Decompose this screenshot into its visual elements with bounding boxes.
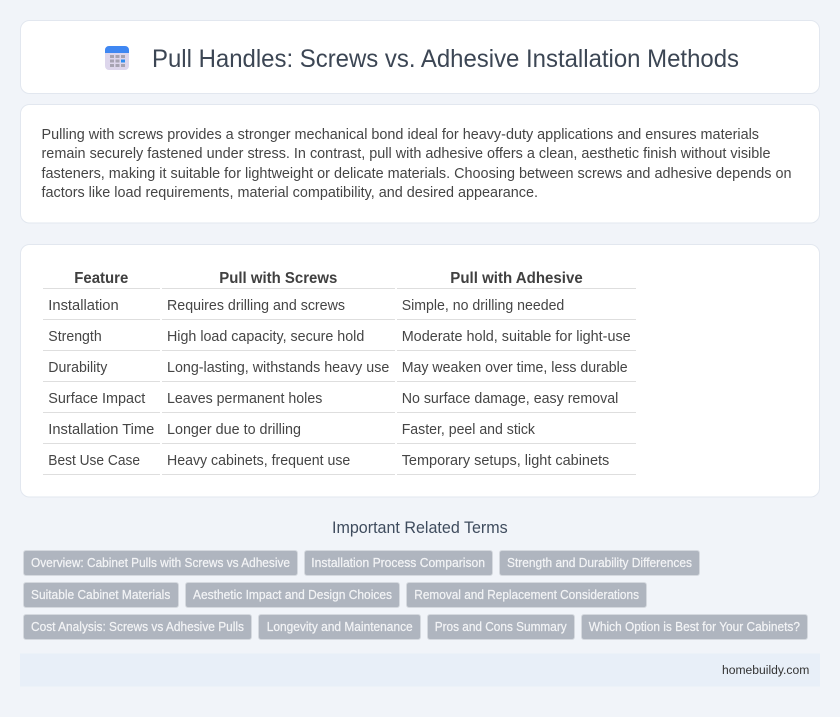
- row: installation time: Faster, peel and stick: [402, 422, 536, 438]
- row: installation: [48, 298, 564, 314]
- row: installation time: Longer due to drilling: [167, 422, 301, 438]
- tag: Installation Process Comparison: [311, 556, 485, 570]
- row: durability: Long-lasting, withstands heavy use: [167, 360, 389, 376]
- row: surface impact: Surface Impact: [48, 391, 145, 407]
- row: best use case: Heavy cabinets, frequent use: [167, 453, 350, 469]
- summary text: Pulling with screws provides a stronger mechanical bond ideal for heavy-duty applications and ensures materials: [42, 127, 759, 143]
- tag: [582, 614, 808, 640]
- table header: Pull with Screws: [219, 270, 338, 287]
- tag: Strength and Durability Differences: [507, 556, 692, 570]
- summary text: [42, 127, 792, 201]
- header panel: [20, 20, 820, 94]
- icon: calendar: [105, 46, 129, 70]
- row: strength: High load capacity, secure hold: [167, 329, 364, 345]
- tag: Which Option is Best for Your Cabinets?: [589, 620, 800, 634]
- table header: [74, 270, 583, 287]
- row: surface impact: [48, 391, 618, 407]
- row: strength: Moderate hold, suitable for light-use: [402, 329, 631, 345]
- row: installation time: Installation Time: [48, 422, 154, 438]
- row: surface impact: Leaves permanent holes: [167, 391, 322, 407]
- footer: [20, 654, 820, 686]
- row: best use case: Best Use Case: [48, 453, 140, 469]
- footer: homebuildy.com: [722, 663, 809, 677]
- tag: Cost Analysis: Screws vs Adhesive Pulls: [31, 620, 244, 634]
- table header: Feature: [74, 270, 129, 287]
- row: strength: Strength: [48, 329, 102, 345]
- row: installation: Requires drilling and screws: [167, 298, 345, 314]
- tag: [24, 550, 298, 576]
- summary text: remain securely fastened under stress. In contrast, pull with adhesive offers a clean, aesthetic finish without visible: [42, 146, 770, 162]
- heading: related terms: Important Related Terms: [332, 519, 508, 537]
- row: durability: May weaken over time, less durable: [402, 360, 628, 376]
- row: best use case: Temporary setups, light cabinets: [402, 453, 609, 469]
- tag: [24, 614, 252, 640]
- table header: Pull with Adhesive: [450, 270, 583, 287]
- title: Pull Handles: Screws vs. Adhesive Installation Methods: [152, 45, 739, 73]
- tag: Suitable Cabinet Materials: [31, 588, 170, 602]
- tag: [304, 550, 492, 576]
- tag: [500, 550, 700, 576]
- tag: Overview: Cabinet Pulls with Screws vs Adhesive: [31, 556, 290, 570]
- tag: Longevity and Maintenance: [267, 620, 413, 634]
- panel: comparison table: [20, 244, 820, 497]
- tag: [428, 614, 574, 640]
- tag: [186, 582, 400, 608]
- row: durability: Durability: [48, 360, 108, 376]
- row: surface impact: No surface damage, easy removal: [402, 391, 618, 407]
- tag: [258, 614, 420, 640]
- tag: Pros and Cons Summary: [435, 620, 567, 634]
- summary text: factors like load requirements, material compatibility, and desired appearance.: [42, 185, 538, 201]
- row: durability: [48, 360, 628, 376]
- tag: Aesthetic Impact and Design Choices: [193, 588, 392, 602]
- row: strength: [48, 329, 631, 345]
- row: installation: Installation: [48, 298, 119, 314]
- related term tags: [24, 550, 808, 640]
- tag: [406, 582, 646, 608]
- tag: Removal and Replacement Considerations: [414, 588, 639, 602]
- row: installation time: [48, 422, 536, 438]
- row: best use case: [48, 453, 609, 469]
- summary text: fasteners, making it suitable for lightweight or delicate materials. Choosing between screws and adhesive depends on: [42, 166, 792, 182]
- tag: [24, 582, 178, 608]
- panel: summary: [20, 104, 820, 223]
- row: installation: Simple, no drilling needed: [402, 298, 564, 314]
